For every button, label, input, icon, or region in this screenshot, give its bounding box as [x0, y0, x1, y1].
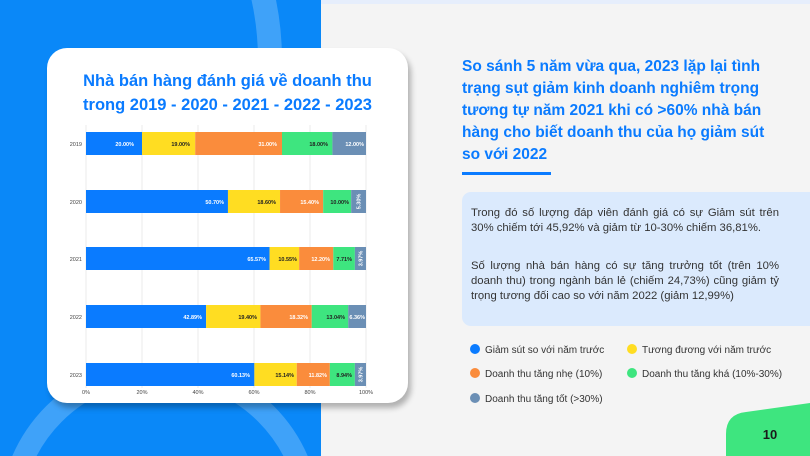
bar 2022: 18.32%: [289, 315, 308, 321]
bar 2022: [86, 305, 366, 328]
bar 2021: 7.71%: [336, 257, 352, 263]
bar 2019: 20.00%: [115, 142, 134, 148]
chart title: Nhà bán hàng đánh giá về doanh thu: [83, 72, 372, 90]
bar 2022: 19.40%: [238, 315, 257, 321]
bar chart: [70, 125, 373, 396]
bar 2023: 60.13%: [231, 373, 250, 379]
chart title: [83, 72, 372, 114]
heading: right: So sánh 5 năm vừa qua, 2023 lặp lại tình trạng sụt giảm kinh doanh nghiêm trọng tương tự năm 2021 khi có >60% nhà bán hàng cho biết doanh thu của họ giảm sút so với 2022: [462, 58, 764, 163]
legend: Tương đương với năm trước: [642, 345, 771, 356]
bar chart: 2023: [70, 373, 82, 379]
bar 2021: 65.57%: [247, 257, 266, 263]
bar chart: 100%: [359, 390, 373, 396]
bar chart: 0%: [82, 390, 90, 396]
bar 2023: [86, 363, 366, 386]
bar 2020: 18.60%: [257, 200, 276, 206]
bar 2019: 18.00%: [309, 142, 328, 148]
bar 2021: 3.97%: [358, 251, 364, 266]
bar chart: 20%: [136, 390, 148, 396]
legend: [470, 344, 782, 405]
blue left panel: [0, 0, 321, 456]
bar 2022: 42.89%: [183, 315, 202, 321]
bar chart: 80%: [304, 390, 316, 396]
bar 2020: [86, 190, 366, 213]
bar chart: 2022: [70, 315, 82, 321]
bar chart: 2020: [70, 200, 82, 206]
bar 2022: 6.36%: [349, 315, 365, 321]
page number badge: [726, 403, 810, 456]
bar chart: 2021: [70, 257, 82, 263]
panel: chart card: [47, 48, 408, 403]
bar 2021: 10.55%: [278, 257, 297, 263]
bar 2021: 12.20%: [311, 257, 330, 263]
underline accent: [462, 172, 551, 175]
bar 2021: [86, 247, 366, 270]
bar 2019: [86, 132, 366, 155]
bar chart: 60%: [248, 390, 260, 396]
bar 2023: 3.97%: [358, 367, 364, 382]
bar 2020: 10.00%: [330, 200, 349, 206]
bar 2020: 5.30%: [356, 194, 362, 209]
page number badge: 10: [763, 427, 777, 442]
legend: Doanh thu tăng khá (10%-30%): [642, 369, 782, 380]
bar 2023: 15.14%: [275, 373, 294, 379]
text block: details box: Số lượng nhà bán hàng có sự tăng trưởng tốt (trên 10% doanh thu) trong ngành bán lẻ (chiếm 24,73%) cũng giảm tỷ trọng tương đối cao so với năm 2022 (giảm 12,99%): [471, 260, 779, 302]
legend: Doanh thu tăng tốt (>30%): [485, 394, 603, 405]
bar chart: 2019: [70, 142, 82, 148]
text block: details box: [462, 192, 810, 326]
top strip: [321, 0, 810, 4]
bar 2019: 12.00%: [345, 142, 364, 148]
legend: Doanh thu tăng nhẹ (10%): [485, 369, 602, 380]
legend: Giảm sút so với năm trước: [485, 345, 604, 356]
bar 2022: 13.04%: [326, 315, 345, 321]
bar chart: 40%: [192, 390, 204, 396]
bar 2023: 11.82%: [309, 373, 327, 379]
bar 2023: 8.94%: [336, 373, 352, 379]
bar 2020: 15.40%: [300, 200, 319, 206]
bar 2020: 50.70%: [205, 200, 224, 206]
bar 2019: 31.00%: [258, 142, 277, 148]
text block: details box: Trong đó số lượng đáp viên đánh giá có sự Giảm sút trên 30% chiếm tới 45,92% và giảm từ 10-30% chiếm 36,81%.: [471, 207, 779, 234]
bar 2019: 19.00%: [171, 142, 190, 148]
chart title: trong 2019 - 2020 - 2021 - 2022 - 2023: [83, 96, 372, 114]
